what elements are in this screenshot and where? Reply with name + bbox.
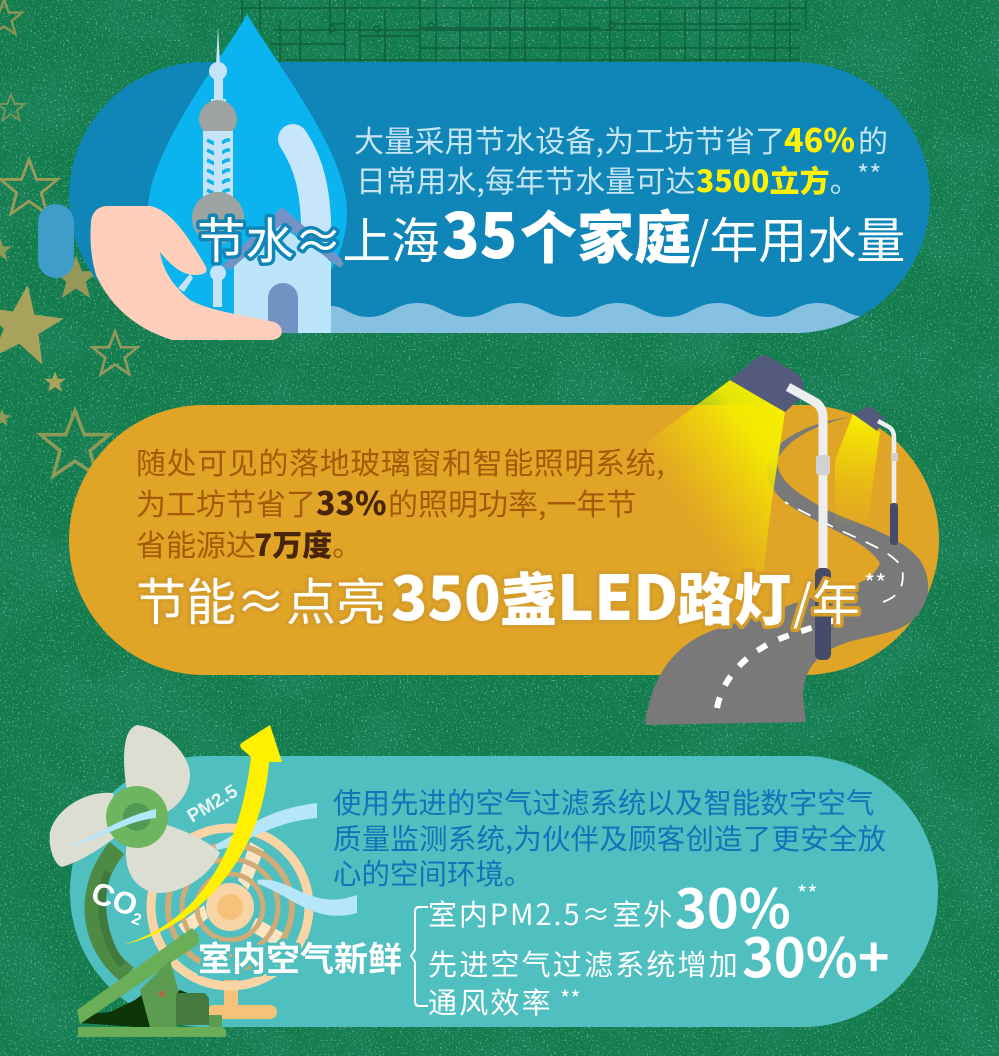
stats	[428, 865, 890, 1022]
icon: oriental pearl tower	[178, 27, 244, 307]
heading: 路灯	[677, 555, 791, 637]
stats: 通风效率	[428, 980, 553, 1022]
text block: 心的空间环境。	[333, 852, 532, 893]
text block: 随处可见的落地玻璃窗和智能照明系统,	[136, 439, 665, 483]
label: CO2: 2	[129, 910, 144, 929]
text block	[136, 439, 665, 565]
stats: **	[560, 982, 581, 1014]
text block: **	[857, 155, 881, 192]
text block	[354, 116, 888, 201]
heading: /年用水量	[690, 202, 905, 273]
text block: 使用先进的空气过滤系统以及智能数字空气	[333, 781, 874, 822]
panel background: energy	[69, 405, 939, 675]
heading: **	[864, 564, 886, 599]
text block: 46%	[784, 116, 855, 162]
icon: desk fan	[151, 828, 309, 1019]
icon: house	[222, 207, 345, 333]
icon: side tab	[38, 204, 74, 278]
heading: 盏	[500, 555, 557, 637]
icon: far street lamp	[853, 406, 898, 545]
text block: 3500立方	[696, 157, 830, 201]
text block: 质量监测系统,为伙伴及顾客创造了更安全放	[333, 817, 886, 858]
heading: 个家庭	[520, 193, 691, 275]
icon: hand	[91, 206, 282, 340]
stats: 30%+	[742, 914, 890, 993]
icon: clip fan	[50, 725, 226, 1037]
panel: fresh air	[50, 725, 938, 1037]
text block: 7万度	[254, 521, 332, 565]
heading: 35	[442, 186, 518, 276]
stats: 先进空气过滤系统增加	[428, 942, 740, 984]
icon: road	[645, 417, 928, 725]
stats: 30%	[675, 865, 791, 944]
stats: 室内PM2.5≈室外	[428, 892, 674, 934]
icon: yellow arrow	[122, 725, 282, 945]
icon: air ribbons	[215, 803, 357, 916]
heading: 350	[391, 551, 501, 638]
icon: light beams	[634, 380, 880, 600]
text block: 33%	[316, 479, 387, 525]
icon: pipe	[293, 139, 316, 250]
text block: 。	[830, 157, 860, 201]
heading: 节能≈点亮	[136, 563, 386, 635]
icon: near street lamp	[730, 355, 831, 660]
heading: /年	[793, 564, 860, 634]
text block: 为工坊节省了	[136, 480, 316, 524]
panel: water saving	[38, 14, 930, 340]
text block: 大量采用节水设备,为工坊节省了	[354, 117, 785, 161]
label: PM2.5: PM2.5	[184, 781, 242, 827]
panel background: air	[70, 756, 938, 1027]
stats: **	[797, 877, 818, 909]
wave band	[331, 303, 860, 333]
panel: energy saving	[69, 355, 939, 725]
text block: 省能源达	[136, 521, 256, 565]
panel background: water	[69, 62, 930, 333]
text block: 的照明功率,一年节	[388, 480, 636, 524]
text block: 日常用水,每年节水量可达	[356, 157, 696, 201]
chalk stars	[0, 0, 137, 476]
label: CO2: CO	[87, 875, 142, 923]
heading: 室内空气新鲜	[198, 932, 402, 981]
brace	[411, 907, 428, 1006]
icon: water drop	[148, 14, 347, 325]
text block	[333, 781, 886, 893]
chalk sketch of building	[242, 0, 806, 62]
text block: 。	[332, 521, 362, 565]
text block: 的	[858, 117, 888, 161]
heading: 节水≈上海	[197, 202, 440, 272]
road centre dashes	[717, 502, 903, 708]
heading: LED	[557, 548, 678, 638]
